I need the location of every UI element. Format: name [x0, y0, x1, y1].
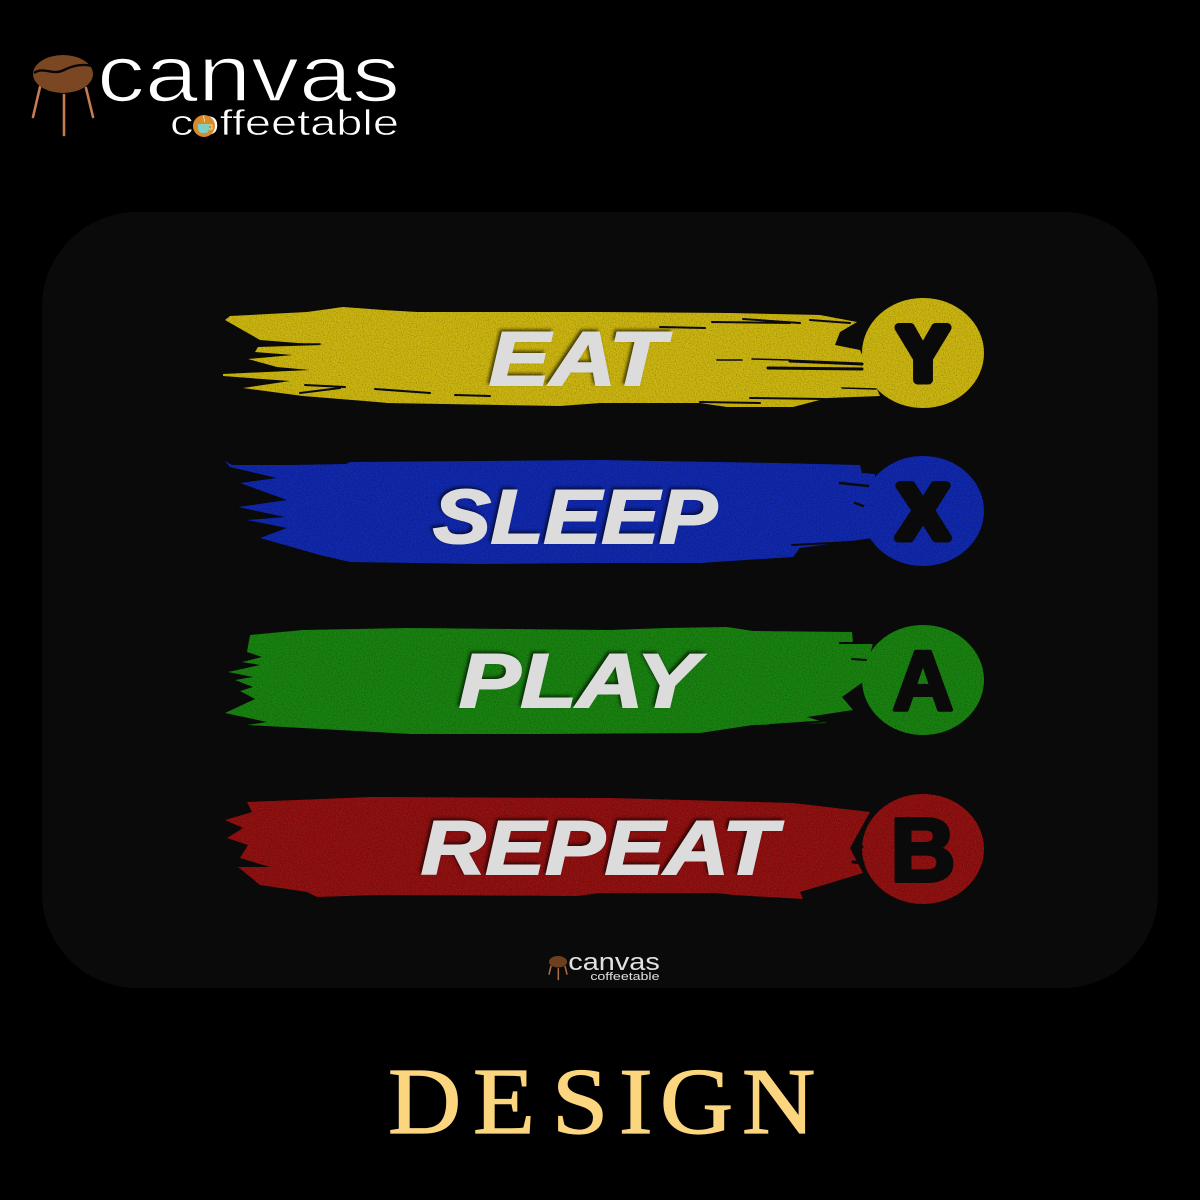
small logo on mat: [549, 949, 660, 983]
word: sleep: SLEEP: [433, 475, 717, 560]
brush stroke: blue: [225, 456, 984, 566]
icon: coffee cup badge: [193, 115, 215, 137]
word: eat: EAT: [489, 317, 672, 402]
icon: coffee bean table: [33, 55, 93, 135]
button letter: A: A: [893, 634, 953, 728]
button letter: B: B: [890, 801, 956, 901]
brush streaks: [300, 319, 876, 403]
brush stroke: red: [225, 794, 984, 904]
small logo wordmark: canvas: canvas: [568, 949, 660, 976]
brush stroke: green: [225, 625, 984, 735]
panel: desk mat: [42, 212, 1158, 988]
button letter: X: X: [898, 470, 949, 555]
row: repeat: [225, 794, 984, 904]
logo: canvas coffeetable: [33, 29, 400, 143]
word: repeat: REPEAT: [421, 806, 784, 891]
brush streaks: [792, 483, 872, 550]
title: design: DESIGN: [388, 1050, 815, 1154]
row: sleep: [225, 456, 984, 566]
word: play: PLAY: [459, 639, 706, 724]
row: play: [225, 625, 984, 735]
brush streaks: [770, 643, 875, 725]
brush streaks: [852, 847, 863, 863]
button letter: Y: Y: [898, 312, 948, 397]
small logo wordmark: coffeetable: coffeetable: [590, 971, 659, 983]
brush stroke: yellow: [223, 298, 984, 408]
row: eat: [223, 298, 984, 408]
logo wordmark: coffeetable: coffeetable: [170, 102, 399, 143]
logo wordmark: canvas: canvas: [97, 29, 400, 118]
small logo icon: [549, 956, 567, 980]
